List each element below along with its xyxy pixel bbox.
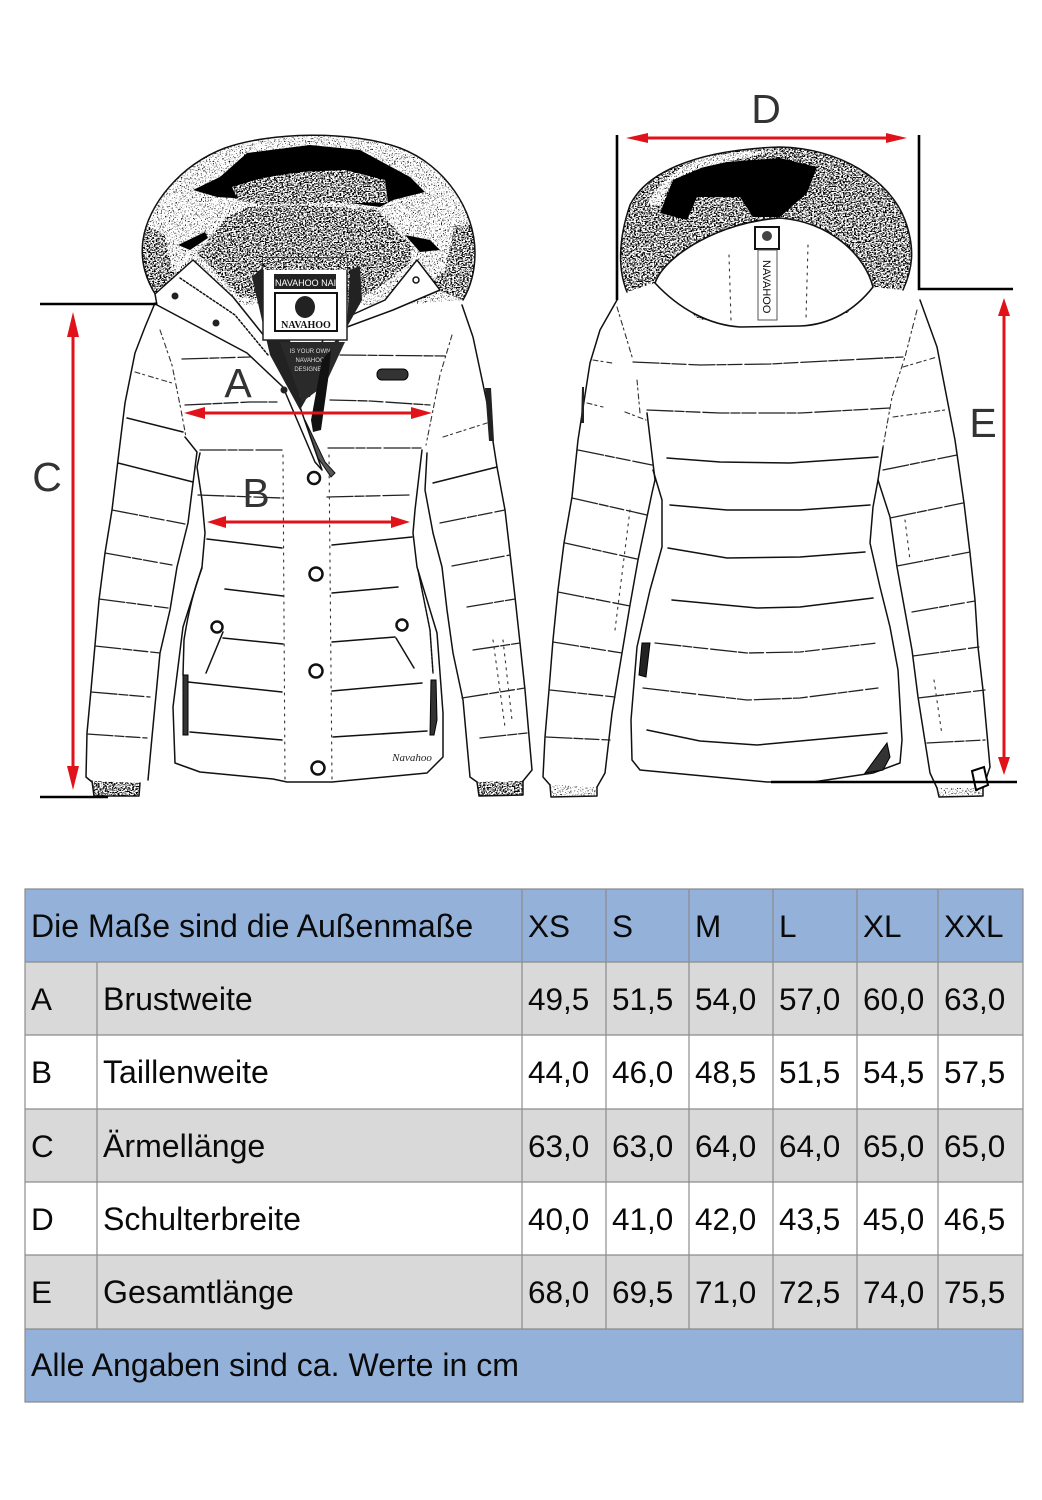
table header row: XXL [944, 908, 1004, 944]
row A: Brustweite: 49,5 [528, 981, 589, 1017]
row C: Ärmellänge: 65,0 [944, 1128, 1005, 1164]
row B: Taillenweite: 48,5 [695, 1054, 756, 1090]
chest badge [377, 369, 408, 380]
row D: Schulterbreite: 45,0 [863, 1201, 924, 1237]
row B: Taillenweite: 46,0 [612, 1054, 673, 1090]
measurement letter E: E [969, 400, 997, 446]
row C: Ärmellänge: Ärmellänge [103, 1128, 265, 1164]
row D: Schulterbreite: 40,0 [528, 1201, 589, 1237]
back quilting lines [546, 357, 985, 745]
row A: Brustweite [25, 962, 1023, 1035]
measurement letter D: D [751, 86, 781, 132]
table header row [25, 889, 1023, 962]
measurement letter C: C [32, 454, 62, 500]
table header row: L [779, 908, 797, 944]
table header row: XS [528, 908, 570, 944]
front quilting lines [87, 355, 527, 780]
brand label inside collar: IS YOUR OWN [290, 349, 330, 355]
row B: Taillenweite: 54,5 [863, 1054, 924, 1090]
measurement letter A: A [224, 360, 252, 406]
sleeve tab on back left [581, 387, 584, 423]
brand label inside collar: DESIGNED [294, 367, 326, 373]
back neck label [729, 227, 808, 320]
front inner hood fur [197, 205, 413, 300]
row C: Ärmellänge: 64,0 [695, 1128, 756, 1164]
brand label inside collar [252, 258, 362, 410]
row D: Schulterbreite: 43,5 [779, 1201, 840, 1237]
row B: Taillenweite: 57,5 [944, 1054, 1005, 1090]
row E: Gesamtlänge: Gesamtlänge [103, 1274, 294, 1310]
brand label inside collar: NAVAHOO [295, 358, 325, 364]
row E: Gesamtlänge: E [31, 1274, 52, 1310]
back hem tag [865, 743, 890, 773]
row E: Gesamtlänge: 72,5 [779, 1274, 840, 1310]
table header row: S [612, 908, 633, 944]
row A: Brustweite: 57,0 [779, 981, 840, 1017]
row D: Schulterbreite: 46,5 [944, 1201, 1005, 1237]
arrow E: total length [998, 298, 1010, 775]
row C: Ärmellänge: 63,0 [528, 1128, 589, 1164]
signature: Navahoo [391, 752, 432, 764]
arrow D: shoulder width [626, 133, 907, 143]
row D: Schulterbreite: 42,0 [695, 1201, 756, 1237]
row D: Schulterbreite: Schulterbreite [103, 1201, 301, 1237]
row A: Brustweite: 54,0 [695, 981, 756, 1017]
row C: Ärmellänge: 65,0 [863, 1128, 924, 1164]
size table [25, 889, 1023, 1402]
front view of jacket [86, 135, 532, 796]
measurement letter B: B [242, 470, 270, 516]
table footer note: Alle Angaben sind ca. Werte in cm [31, 1347, 519, 1383]
row E: Gesamtlänge: 75,5 [944, 1274, 1005, 1310]
row D: Schulterbreite: D [31, 1201, 54, 1237]
row B: Taillenweite: 44,0 [528, 1054, 589, 1090]
row D: Schulterbreite: 41,0 [612, 1201, 673, 1237]
front cuffs [92, 781, 523, 796]
back cuff tag [972, 767, 988, 790]
pockets [183, 568, 437, 735]
brand label inside collar: NAVAHOO NAI [275, 278, 336, 288]
brand label inside collar: NAVAHOO [281, 320, 331, 331]
back view of jacket [543, 147, 990, 797]
sleeve tab [485, 388, 494, 441]
row C: Ärmellänge: C [31, 1128, 54, 1164]
row E: Gesamtlänge: 69,5 [612, 1274, 673, 1310]
arrow B: waist width [207, 516, 410, 528]
row C: Ärmellänge: 63,0 [612, 1128, 673, 1164]
row D: Schulterbreite [25, 1182, 1023, 1255]
table header row: XL [863, 908, 902, 944]
row E: Gesamtlänge: 71,0 [695, 1274, 756, 1310]
table footer note [25, 1329, 1023, 1402]
table header row: Die Maße sind die Außenmaße [31, 908, 473, 944]
arrow A: chest width [184, 407, 432, 419]
back hood fur [621, 147, 912, 320]
row A: Brustweite: 60,0 [863, 981, 924, 1017]
row A: Brustweite: Brustweite [103, 981, 253, 1017]
row A: Brustweite: 51,5 [612, 981, 673, 1017]
row C: Ärmellänge: 64,0 [779, 1128, 840, 1164]
back side tab [639, 643, 650, 677]
row E: Gesamtlänge: 68,0 [528, 1274, 589, 1310]
row A: Brustweite: A [31, 981, 52, 1017]
row C: Ärmellänge [25, 1109, 1023, 1182]
row B: Taillenweite: B [31, 1054, 52, 1090]
back hood inner [655, 218, 873, 327]
back neck label: NAVAHOO [760, 260, 772, 314]
row B: Taillenweite [25, 1035, 1023, 1109]
black reference lines [40, 135, 1017, 797]
row E: Gesamtlänge: 74,0 [863, 1274, 924, 1310]
row B: Taillenweite: 51,5 [779, 1054, 840, 1090]
table header row: M [695, 908, 721, 944]
back cuffs [550, 785, 983, 797]
row A: Brustweite: 63,0 [944, 981, 1005, 1017]
front collar and placket [155, 260, 440, 470]
front buttons [212, 472, 408, 774]
front zipper [305, 350, 335, 477]
front hood fur [142, 135, 475, 305]
sleeves and body outline [86, 303, 532, 782]
row E: Gesamtlänge [25, 1255, 1023, 1329]
back sleeves and body outline [543, 300, 990, 788]
arrow C: sleeve length [67, 312, 79, 790]
row B: Taillenweite: Taillenweite [103, 1054, 269, 1090]
